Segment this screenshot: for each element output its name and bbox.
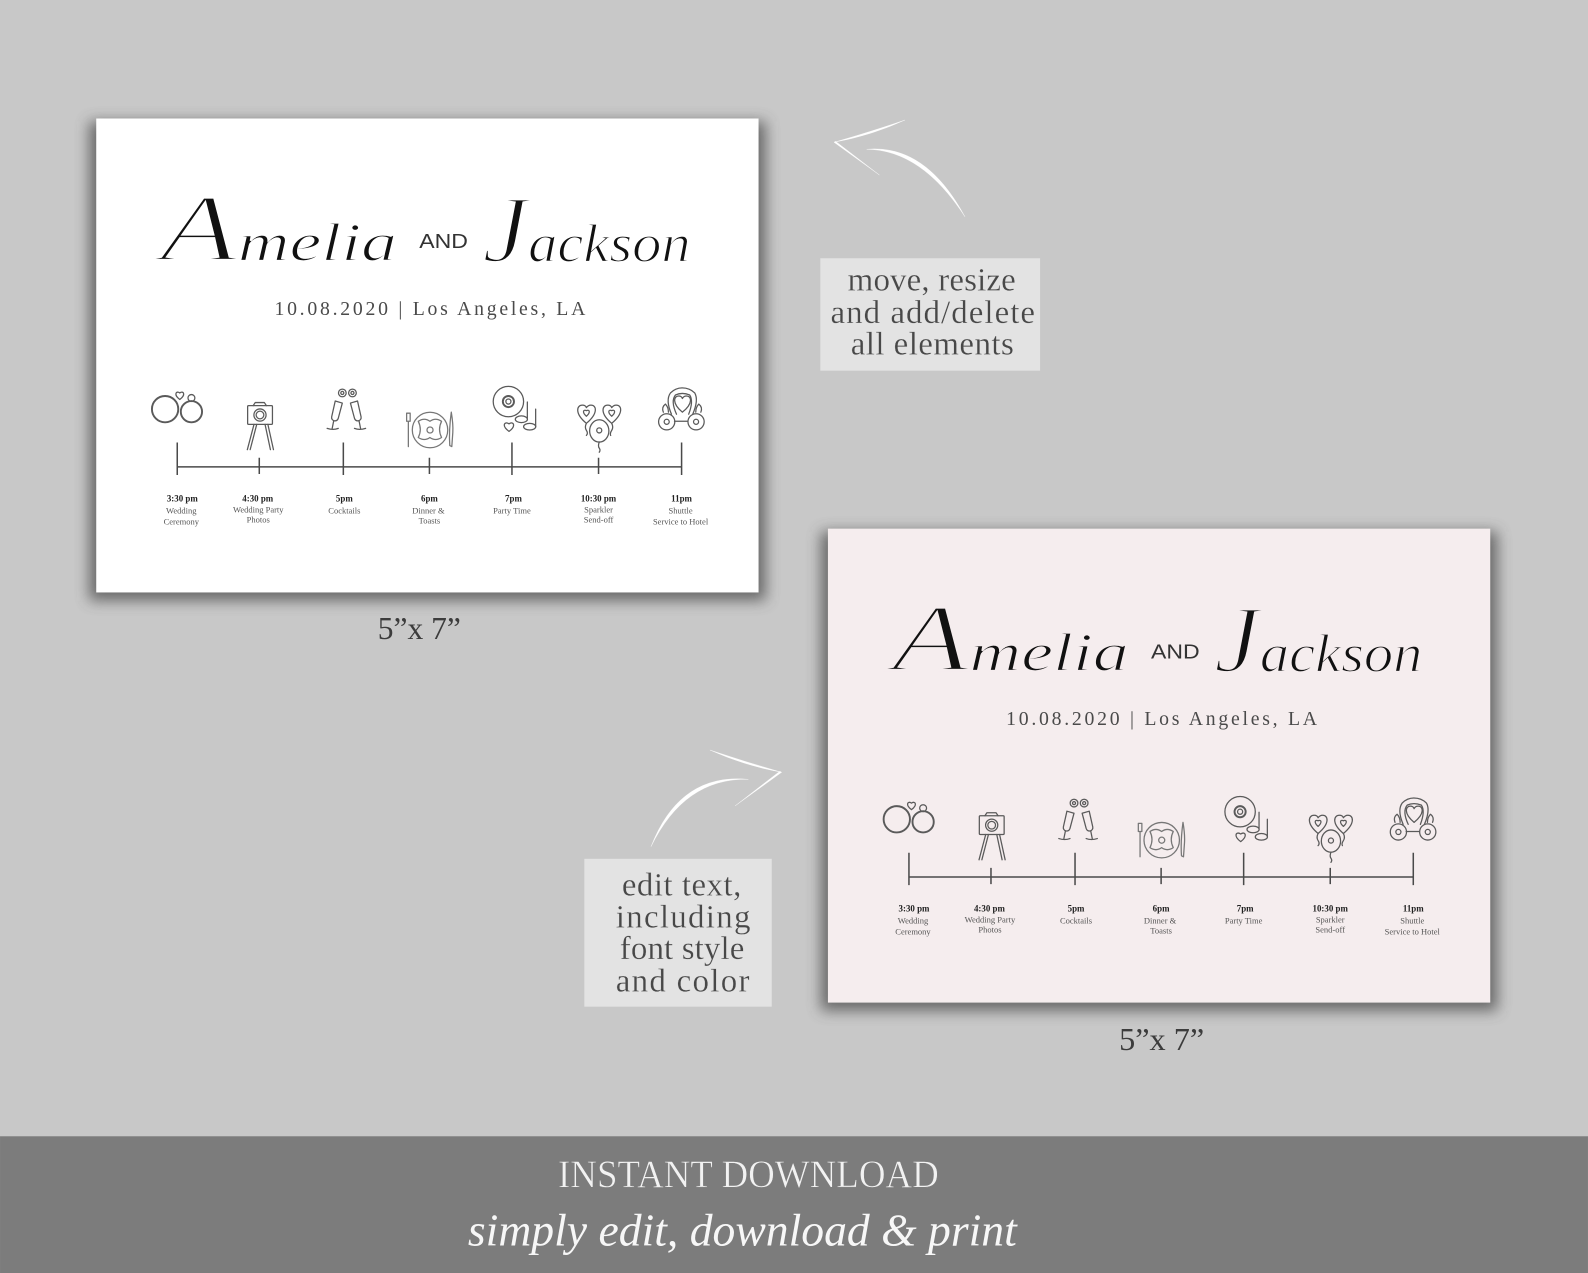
timeline labels (164, 493, 709, 527)
timeline labels: 7pm (505, 493, 522, 503)
callout: edit text: edit text, (622, 867, 741, 903)
timeline labels: Service to Hotel (1385, 927, 1441, 937)
callout: edit text (584, 859, 772, 1007)
timeline labels: Wedding Party (965, 915, 1016, 925)
icon: heart balloons (1309, 815, 1352, 862)
timeline labels: Toasts (1150, 926, 1172, 936)
panel: white timeline card (89, 118, 766, 601)
icon: place setting (407, 412, 453, 448)
heading: couple names: Jackson (482, 176, 691, 282)
heading: couple names: AND (419, 230, 468, 253)
timeline labels: Dinner & (412, 505, 445, 515)
icon: place setting (1138, 822, 1185, 858)
timeline labels: 4:30 pm (974, 903, 1005, 913)
heading: couple names: Jackson (1214, 586, 1422, 692)
icon: wedding rings (884, 802, 934, 832)
callout: move and resize (820, 258, 1040, 371)
icon: heart balloons (578, 405, 621, 452)
footer tagline: simply edit, download & print (468, 1205, 1018, 1256)
timeline labels: 11pm (1403, 903, 1424, 913)
size label: pink card: 5”x 7” (1119, 1022, 1204, 1057)
timeline labels: 11pm (671, 493, 693, 503)
arrow: up-right to pink card (651, 750, 782, 847)
timeline labels: Party Time (1225, 916, 1263, 926)
heading: couple names (152, 175, 691, 282)
icon: record and music notes (1225, 797, 1267, 842)
timeline labels: Sparkler (584, 504, 613, 514)
arrow: up-left to white card (834, 120, 965, 217)
icon: record and music notes (493, 386, 536, 431)
timeline labels: 5pm (336, 493, 353, 503)
timeline labels: Photos (978, 925, 1002, 935)
timeline labels: Shuttle (1400, 916, 1425, 926)
callout: move and resize: move, resize (848, 263, 1016, 299)
timeline labels: Ceremony (164, 517, 200, 527)
timeline labels: 3:30 pm (899, 903, 930, 913)
timeline labels (895, 903, 1441, 937)
timeline axis (177, 443, 682, 475)
timeline labels: Wedding Party (233, 504, 284, 514)
panel: pink timeline card (821, 529, 1497, 1011)
timeline labels: Sparkler (1316, 915, 1345, 925)
text: date and place: 10.08.2020 | Los Angeles, LA (1006, 708, 1318, 730)
callout: edit text: font style (620, 931, 744, 967)
timeline labels: 3:30 pm (167, 493, 198, 503)
callout: move and resize: and add/delete (830, 295, 1035, 331)
footer banner (0, 1136, 1588, 1273)
timeline labels: 10:30 pm (1313, 903, 1349, 913)
timeline labels: Photos (247, 515, 270, 525)
icon: champagne toast (1059, 799, 1097, 840)
icon: carriage (1390, 798, 1436, 840)
callout: edit text: including (616, 900, 750, 936)
timeline labels: Service to Hotel (653, 517, 709, 527)
timeline labels: Wedding (898, 916, 929, 926)
timeline labels: 7pm (1237, 903, 1254, 913)
icon: champagne toast (327, 389, 366, 429)
timeline labels: Dinner & (1144, 916, 1177, 926)
size label: white card: 5”x 7” (378, 611, 461, 646)
timeline labels: 6pm (421, 493, 438, 503)
icon: camera on tripod (979, 813, 1005, 860)
heading: couple names: AND (1151, 640, 1200, 663)
timeline labels: Party Time (493, 505, 531, 515)
timeline labels: Cocktails (1060, 916, 1092, 926)
heading: couple names: A melia (152, 175, 397, 281)
timeline labels: 10:30 pm (581, 493, 617, 503)
callout: edit text: and color (616, 963, 749, 999)
timeline labels: Toasts (419, 516, 440, 526)
footer heading: INSTANT DOWNLOAD (558, 1152, 939, 1196)
heading: couple names (884, 585, 1422, 692)
timeline labels: Shuttle (669, 505, 693, 515)
timeline labels: 4:30 pm (242, 493, 274, 503)
callout: move and resize: all elements (851, 326, 1014, 362)
timeline labels: Send-off (1315, 925, 1345, 935)
timeline labels: Ceremony (895, 927, 931, 937)
timeline labels: Wedding (166, 505, 197, 515)
timeline labels: 6pm (1153, 903, 1170, 913)
icon: carriage (659, 388, 704, 430)
icon: wedding rings (152, 392, 202, 422)
timeline labels: Cocktails (328, 505, 360, 515)
text: date and place: 10.08.2020 | Los Angeles, LA (274, 298, 586, 320)
icon: camera on tripod (247, 403, 273, 450)
heading: couple names: A melia (884, 585, 1129, 691)
timeline axis (909, 853, 1413, 885)
timeline labels: 5pm (1068, 903, 1085, 913)
timeline labels: Send-off (584, 515, 614, 525)
